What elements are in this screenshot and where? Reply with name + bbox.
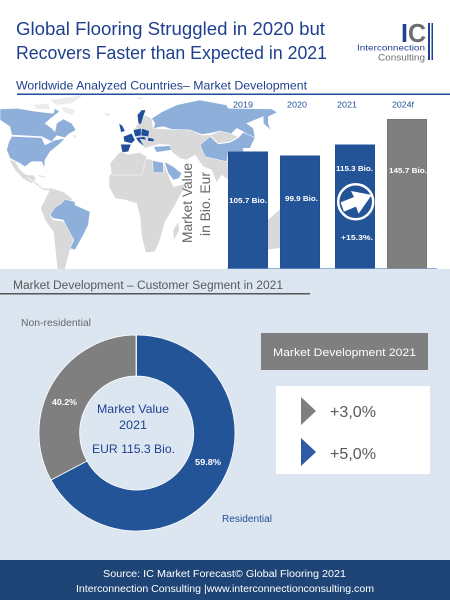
y axis label: Market Value xyxy=(180,163,195,243)
bar chart xyxy=(228,100,427,268)
eurasia xyxy=(105,98,277,182)
segment values xyxy=(52,398,221,467)
panel: growth rates xyxy=(276,386,430,474)
icon: blue triangle xyxy=(301,438,316,466)
year labels: 2019 xyxy=(233,100,254,110)
donut chart xyxy=(39,335,235,531)
logo: Interconnection Consulting: Interconnection xyxy=(357,42,425,52)
australia xyxy=(262,205,300,250)
logo: Interconnection Consulting: IC xyxy=(401,18,426,48)
label: residential: Residential xyxy=(222,514,272,525)
lower panel background xyxy=(0,269,450,560)
eu countries xyxy=(119,110,154,152)
africa xyxy=(109,156,187,253)
blue growth value: +5,0% xyxy=(330,446,376,463)
heading: worldwide analyzed countries: Worldwide Analyzed Countries– Market Development xyxy=(16,78,308,92)
title: Recovers Faster than Expected in 2021 xyxy=(16,42,327,63)
residential segment xyxy=(51,335,235,531)
box: market development 2021 xyxy=(261,333,428,370)
footer xyxy=(0,560,450,600)
year labels: 2020 xyxy=(287,100,308,110)
center label: EUR 115.3 Bio. xyxy=(92,442,175,456)
bar values: 99.9 Bio. xyxy=(285,194,318,203)
bar values: 115.3 Bio. xyxy=(336,164,373,173)
center label: 2021 xyxy=(119,418,147,432)
north america xyxy=(0,95,110,183)
south america xyxy=(27,177,90,269)
year labels: 2021 xyxy=(337,100,358,110)
logo: Interconnection Consulting xyxy=(357,18,433,62)
footer: Source: IC Market Forecast© Global Flooring 2021 xyxy=(103,569,346,580)
label: non-residential: Non-residential xyxy=(21,318,91,329)
icon: growth arrow xyxy=(338,184,373,219)
bars xyxy=(228,120,426,268)
icon: grey triangle xyxy=(301,397,316,425)
non-residential segment xyxy=(39,335,136,480)
bar values: +15.3%. xyxy=(341,233,373,242)
footer: Interconnection Consulting |www.interconnectionconsulting.com xyxy=(76,584,374,595)
world map xyxy=(0,95,300,269)
box: market development 2021: Market Development 2021 xyxy=(273,347,416,359)
bar values: 145.7 Bio. xyxy=(389,166,427,175)
grey growth value: +3,0% xyxy=(330,404,376,421)
year labels: 2024f xyxy=(392,100,415,110)
segment values: 59.8% xyxy=(195,458,221,467)
title xyxy=(16,18,327,63)
center label: Market Value xyxy=(97,402,169,416)
logo: Interconnection Consulting: Consulting xyxy=(378,52,425,62)
year labels xyxy=(233,100,415,110)
bar values: 105.7 Bio. xyxy=(229,196,267,205)
center label xyxy=(92,402,175,456)
baseline xyxy=(227,268,437,269)
title: Global Flooring Struggled in 2020 but xyxy=(16,18,325,39)
y axis label: in Bio. Eur xyxy=(198,171,213,236)
bar values xyxy=(229,164,427,242)
heading: customer segment: Market Development – Customer Segment in 2021 xyxy=(13,280,283,292)
y axis label xyxy=(180,163,213,243)
segment values: 40.2% xyxy=(52,398,77,407)
